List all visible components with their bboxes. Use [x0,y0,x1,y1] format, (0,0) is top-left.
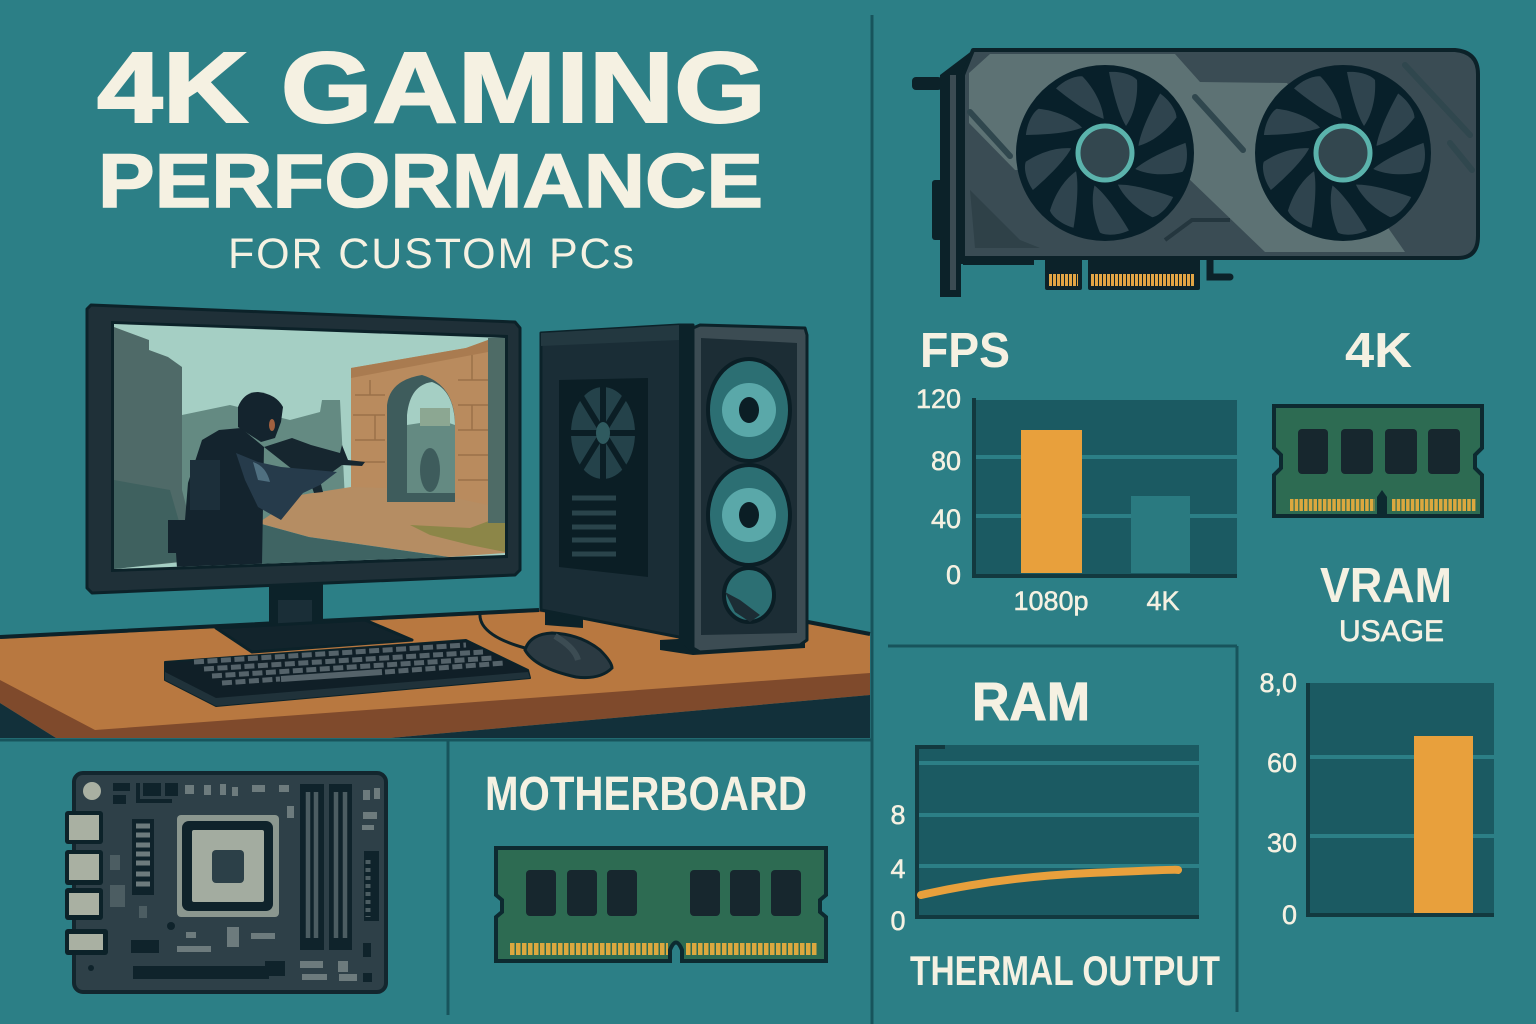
y axis labels: 40 [931,504,961,534]
card shroud [963,50,1478,258]
title: 4K GAMING [97,32,766,144]
heading: 4K: 4K [1345,324,1412,378]
monitor frame [87,305,520,593]
x axis labels: 1080p [1013,586,1089,616]
PCIe connector [963,250,1230,290]
y axis labels: 60 [1267,748,1297,778]
icon: RAM module small [1274,406,1482,516]
y axis labels: 30 [1267,828,1297,858]
y axis labels [890,800,906,936]
y axis labels: 80 [931,446,961,476]
y axis labels: 8,0 [1259,668,1297,698]
bar chart: FPS [916,384,1237,616]
heading: FPS: FPS [920,324,1010,378]
illustration: mouse [480,613,612,678]
x axis labels: 4K [1146,586,1180,616]
y axis labels: 4 [890,854,906,884]
monitor screen [110,320,510,575]
case fan middle [708,465,790,565]
illustration: PC tower [541,325,807,655]
soldier [168,392,365,568]
illustration: graphics card [912,50,1478,297]
title [97,32,766,278]
bar chart: VRAM usage [1259,668,1494,930]
bar: VRAM [1414,736,1473,913]
bar: 1080p [1021,430,1082,573]
line chart: thermal output [890,745,1199,936]
fan left [1016,65,1194,241]
illustration: keyboard [165,640,530,706]
heading: VRAM usage: VRAM [1320,559,1452,613]
RAM slots [300,784,352,950]
side vent [559,378,648,577]
icon: RAM module large [496,848,826,961]
label: thermal output: THERMAL OUTPUT [910,947,1220,994]
case fan top [708,359,790,461]
case fan bottom [724,568,774,622]
title: PERFORMANCE [98,139,763,224]
heading: motherboard: MOTHERBOARD [485,768,807,821]
x axis labels [1013,586,1180,616]
capacitors and chips [83,782,380,982]
y axis labels: 120 [916,384,961,414]
curve [921,870,1178,895]
illustration: monitor [87,305,520,652]
monitor stand [216,583,412,652]
y axis labels [916,384,961,590]
IO ports [65,811,108,955]
heading: VRAM usage: USAGE [1339,615,1444,648]
y axis labels [1259,668,1297,930]
y axis labels: 8 [890,800,906,830]
y axis labels: 0 [890,906,906,936]
bar: 4K [1131,496,1190,573]
icon: motherboard [65,773,386,992]
title: FOR CUSTOM PCs [228,230,634,278]
fan right [1255,65,1431,241]
heading: VRAM usage [1320,559,1452,648]
y axis labels: 0 [946,560,961,590]
bracket [912,50,990,297]
y axis labels: 0 [1282,900,1297,930]
CPU socket [177,815,279,917]
heading: RAM: RAM [972,672,1090,732]
illustration: desk [0,610,870,738]
